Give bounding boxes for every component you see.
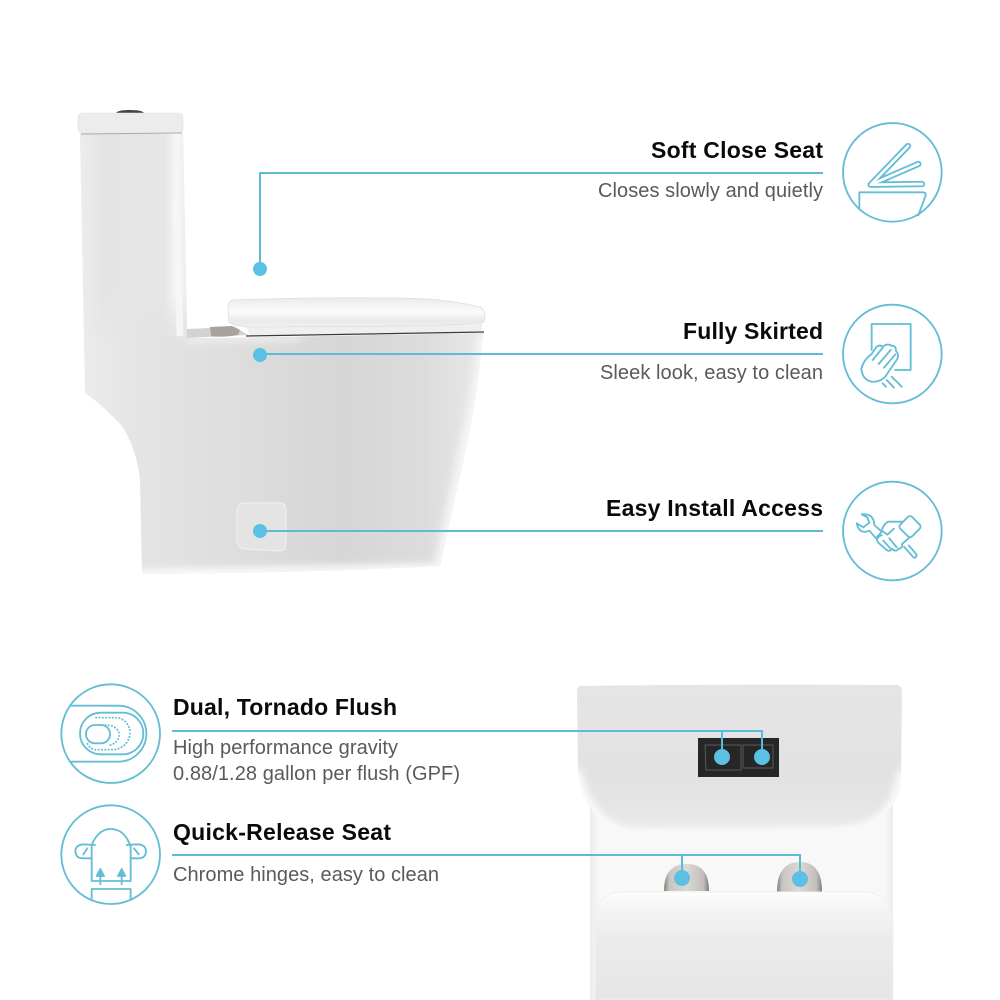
body bottom edge highlight bbox=[140, 568, 440, 574]
tank lid shadow line bbox=[81, 133, 182, 134]
icon: dual tornado flush bbox=[61, 684, 160, 783]
flush button plate bbox=[698, 738, 779, 777]
deck behind hinge bbox=[187, 327, 248, 338]
tank lid front bbox=[577, 685, 902, 834]
tank base corner highlight bbox=[176, 302, 184, 336]
tank lid lower rim highlight bbox=[577, 770, 902, 834]
deck highlight bbox=[187, 338, 300, 340]
seat ring bbox=[246, 322, 482, 336]
marker: soft close seat bbox=[253, 262, 267, 276]
icon: soft close seat bbox=[843, 123, 942, 222]
marker: easy install access bbox=[253, 524, 267, 538]
leader line: quick-release seat bbox=[172, 855, 800, 879]
heading: dual tornado flush: Dual, Tornado Flush bbox=[173, 694, 397, 720]
leader line: fully skirted bbox=[260, 353, 823, 355]
heading: soft close seat: Soft Close Seat bbox=[651, 137, 823, 163]
icon: easy install access bbox=[843, 482, 942, 580]
right hinge bbox=[777, 862, 822, 892]
heading: fully skirted: Fully Skirted bbox=[683, 318, 823, 344]
seat gap bbox=[246, 332, 484, 336]
text: gallons per flush: 0.88/1.28 gallon per flush (GPF) bbox=[173, 763, 460, 785]
icon: fully skirted bbox=[843, 305, 942, 403]
body right edge highlight bbox=[440, 335, 484, 568]
text: high performance gravity: High performance gravity bbox=[173, 737, 398, 759]
tank lid bbox=[78, 113, 183, 134]
flush button outlines bbox=[705, 745, 773, 770]
text: chrome hinges: Chrome hinges, easy to clean bbox=[173, 864, 439, 886]
markers: hinges bbox=[674, 870, 808, 887]
leader line: soft close seat bbox=[260, 173, 823, 269]
text: closes slowly: Closes slowly and quietly bbox=[598, 180, 823, 202]
toilet front view photo bbox=[577, 685, 902, 1000]
leader line: easy install access bbox=[260, 530, 823, 532]
tank and edge highlights bbox=[142, 134, 482, 574]
chrome hinge bbox=[210, 326, 240, 337]
tank column bbox=[168, 134, 186, 322]
heading: easy install access: Easy Install Access bbox=[606, 495, 823, 521]
access panel bbox=[237, 503, 286, 551]
seat lid bbox=[228, 298, 485, 327]
heading: quick-release seat: Quick-Release Seat bbox=[173, 819, 391, 845]
leader line: dual tornado flush bbox=[172, 731, 762, 757]
body column bbox=[590, 800, 893, 1000]
left hinge bbox=[664, 864, 709, 891]
markers: flush buttons bbox=[714, 749, 770, 765]
text: sleek look: Sleek look, easy to clean bbox=[600, 362, 823, 384]
toilet body bbox=[80, 134, 483, 574]
icon: quick-release seat bbox=[61, 805, 160, 904]
marker: fully skirted bbox=[253, 348, 267, 362]
seat lid front bbox=[595, 892, 893, 1000]
toilet side view photo bbox=[78, 110, 485, 574]
flush button top bbox=[116, 110, 144, 113]
